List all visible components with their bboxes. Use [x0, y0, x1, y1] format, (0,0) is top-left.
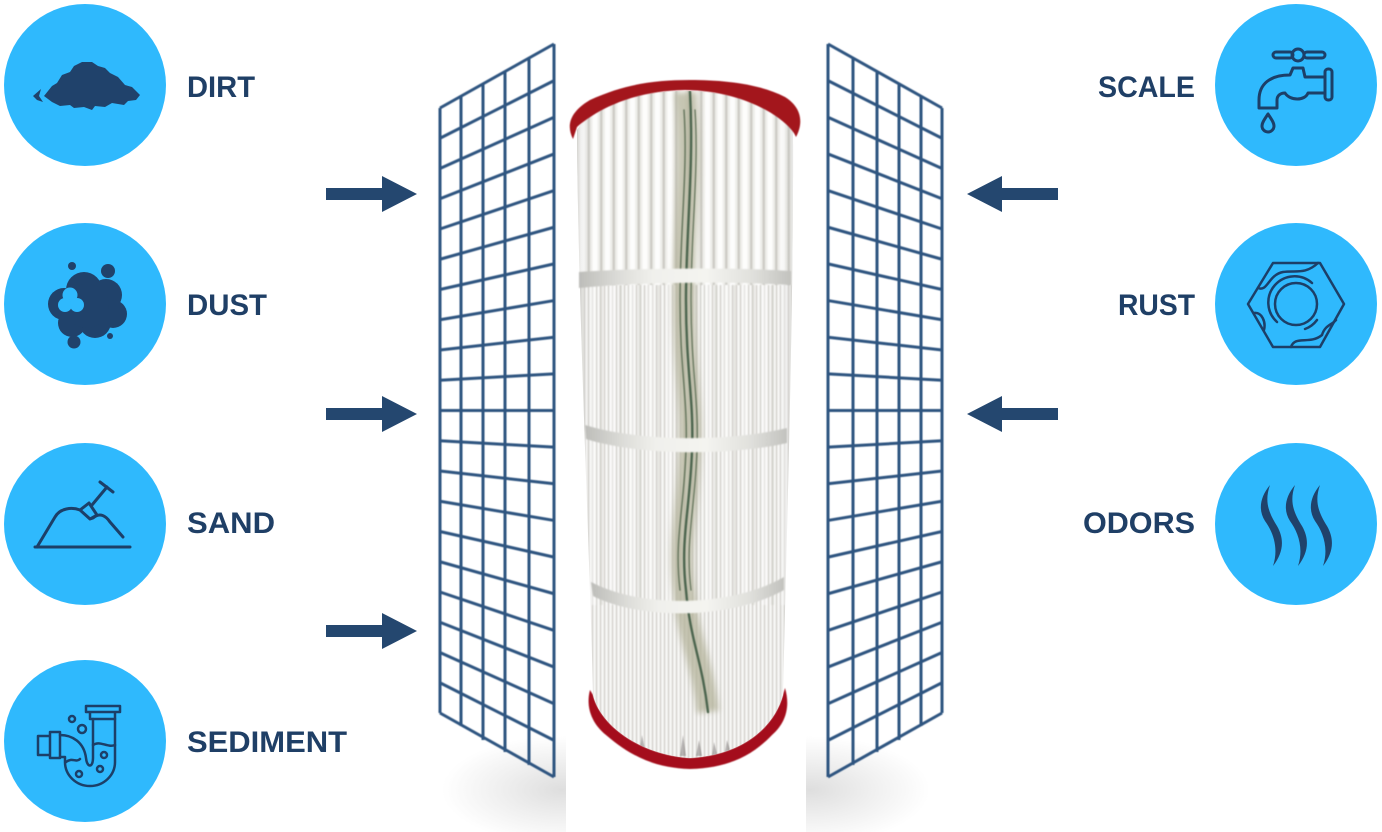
icon: dust cloud — [48, 262, 127, 348]
circle — [4, 223, 166, 385]
filter body with pleats — [570, 80, 800, 770]
circle — [1215, 4, 1377, 166]
icon: sand and shovel — [35, 482, 130, 547]
arrow: left 1 — [326, 176, 417, 212]
icon: dripping faucet — [1259, 49, 1332, 132]
item: sand — [4, 443, 275, 605]
circle — [1215, 223, 1377, 385]
strap band 2 — [585, 425, 787, 452]
arrow: right 2 — [967, 396, 1058, 432]
label: DIRT — [187, 71, 255, 104]
lower pleat shadows — [640, 735, 730, 756]
icon: odor waves — [1261, 485, 1332, 566]
floor shadow: left — [473, 750, 566, 830]
circle — [4, 4, 166, 166]
item: sediment — [4, 660, 347, 822]
central seam: green folds — [678, 92, 708, 712]
circle — [1215, 443, 1377, 605]
icon: rusty nut — [1248, 263, 1344, 347]
left mesh screen — [440, 44, 554, 777]
item: rust — [1118, 223, 1377, 385]
arrow: right 1 — [967, 176, 1058, 212]
right mesh screen — [828, 44, 942, 777]
floor shadow: right — [806, 750, 900, 830]
strap band 1 — [579, 268, 791, 288]
label: RUST — [1118, 289, 1195, 322]
item: odors — [1083, 443, 1377, 605]
label: SAND — [187, 507, 275, 540]
item: dirt — [4, 4, 255, 166]
label: ODORS — [1083, 507, 1195, 540]
label: SEDIMENT — [187, 726, 347, 759]
label: SCALE — [1098, 71, 1195, 104]
icon: clogged pipe — [38, 706, 120, 786]
pleated filter cartridge — [570, 80, 800, 770]
arrow: left 2 — [326, 396, 417, 432]
arrow: left 3 — [326, 613, 417, 649]
circle — [4, 660, 166, 822]
item: dust — [4, 223, 267, 385]
central seam: tan haze — [682, 92, 708, 712]
circle — [4, 443, 166, 605]
icon: dirt pile — [33, 62, 140, 110]
item: scale — [1098, 4, 1377, 166]
bottom red end cap — [589, 688, 787, 769]
strap band 3 — [591, 577, 784, 613]
top red end cap — [570, 80, 800, 139]
label: DUST — [187, 289, 267, 322]
